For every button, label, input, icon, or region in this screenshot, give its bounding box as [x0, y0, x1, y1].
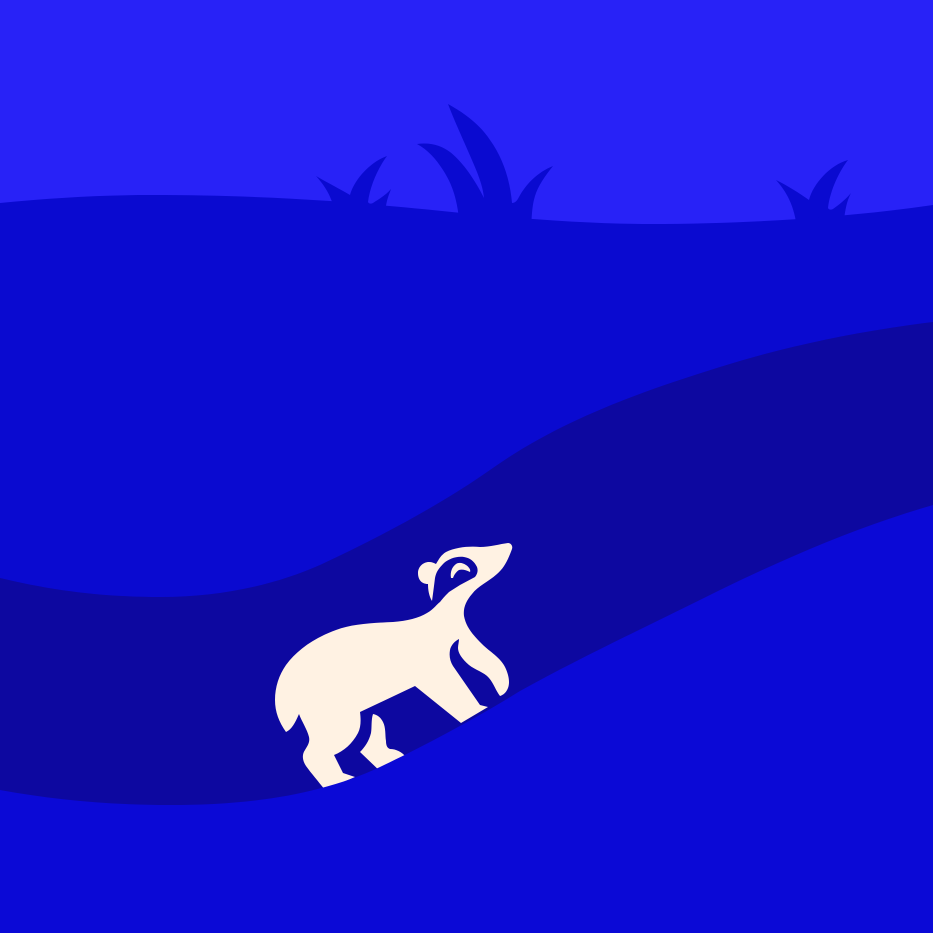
- hill: far background: [0, 195, 933, 933]
- icon: grass tuft right: [776, 160, 851, 230]
- icon: grass tuft left: [316, 156, 391, 215]
- badger: [275, 543, 512, 790]
- badger far hind leg: [360, 714, 406, 775]
- hill: foreground slope: [0, 505, 933, 933]
- hill: dark middle band: [0, 322, 933, 933]
- badger eye: [451, 563, 470, 578]
- badger body: [275, 543, 512, 790]
- icon: grass tuft middle: [417, 104, 553, 230]
